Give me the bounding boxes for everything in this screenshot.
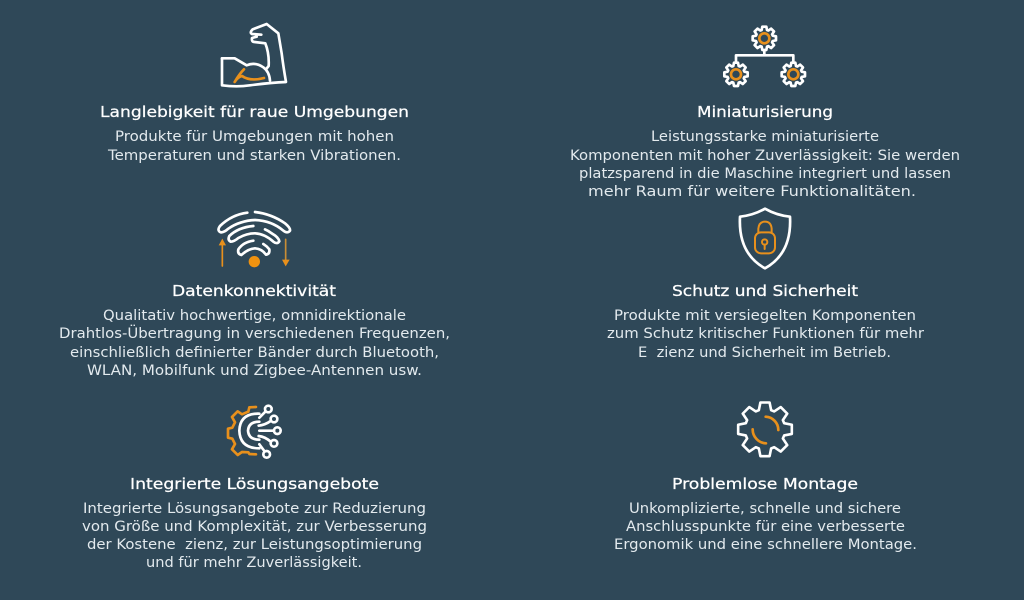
text block: Integrierte Lösungsangebote zur Reduzierung xyxy=(83,501,426,517)
icon: shield with padlock xyxy=(740,209,790,268)
text block: Produkte mit versiegelten Komponenten xyxy=(614,308,916,324)
heading: Problemlose Montage xyxy=(672,475,858,493)
text block: Produkte für Umgebungen mit hohen xyxy=(115,129,394,145)
text block: Drahtlos-Übertragung in verschiedenen Frequenzen, xyxy=(59,324,450,342)
text block: Leistungsstarke miniaturisierte xyxy=(651,129,879,145)
icon: gear hierarchy xyxy=(724,27,805,86)
heading: Miniaturisierung xyxy=(697,103,833,121)
text block: zum Schutz kritischer Funktionen für mehr xyxy=(607,326,924,342)
text block: mehr Raum für weitere Funktionalitäten. xyxy=(588,184,916,200)
text block: platzsparend in die Maschine integriert und lassen xyxy=(579,166,951,182)
text block: WLAN, Mobilfunk und Zigbee-Antennen usw. xyxy=(87,363,422,379)
text block xyxy=(614,501,917,553)
text block: Temperaturen und starken Vibrationen. xyxy=(107,148,401,164)
text block xyxy=(607,308,924,361)
text block: Komponenten mit hoher Zuverlässigkeit: Sie werden xyxy=(570,148,960,164)
heading: Schutz und Sicherheit xyxy=(672,282,858,300)
text block xyxy=(570,129,960,200)
heading: Langlebigkeit für raue Umgebungen xyxy=(100,103,409,121)
text block: von Größe und Komplexität, zur Verbesserung xyxy=(82,519,427,535)
panel: Schutz und Sicherheit xyxy=(607,209,924,361)
panel: Integrierte Lösungsangebote xyxy=(82,406,427,571)
heading: Datenkonnektivität xyxy=(172,282,336,300)
text block: Anschlusspunkte für eine verbesserte xyxy=(626,519,905,535)
icon: gear xyxy=(738,402,792,456)
text block: einschließlich definierter Bänder durch Bluetooth, xyxy=(70,345,439,361)
panel: Problemlose Montage xyxy=(614,402,917,553)
text block: und für mehr Zuverlässigkeit. xyxy=(146,555,362,571)
heading: Integrierte Lösungsangebote xyxy=(130,475,379,493)
text block: Unkomplizierte, schnelle und sichere xyxy=(629,501,901,517)
text block: der Kostene zienz, zur Leistungsoptimierung xyxy=(87,537,422,553)
text block xyxy=(107,129,401,164)
icon: wifi with arrows xyxy=(218,212,290,267)
icon: gear with circuit nodes xyxy=(228,406,281,458)
panel: Datenkonnektivität xyxy=(59,212,450,379)
icon: flexed arm xyxy=(222,24,286,86)
text block: Qualitativ hochwertige, omnidirektionale xyxy=(103,308,406,324)
panel: Langlebigkeit xyxy=(100,24,409,164)
text block xyxy=(59,308,450,379)
panel: Miniaturisierung xyxy=(570,27,960,200)
text block: Ergonomik und eine schnellere Montage. xyxy=(614,537,917,553)
text block: E zienz und Sicherheit im Betrieb. xyxy=(638,345,891,361)
text block xyxy=(82,501,427,571)
